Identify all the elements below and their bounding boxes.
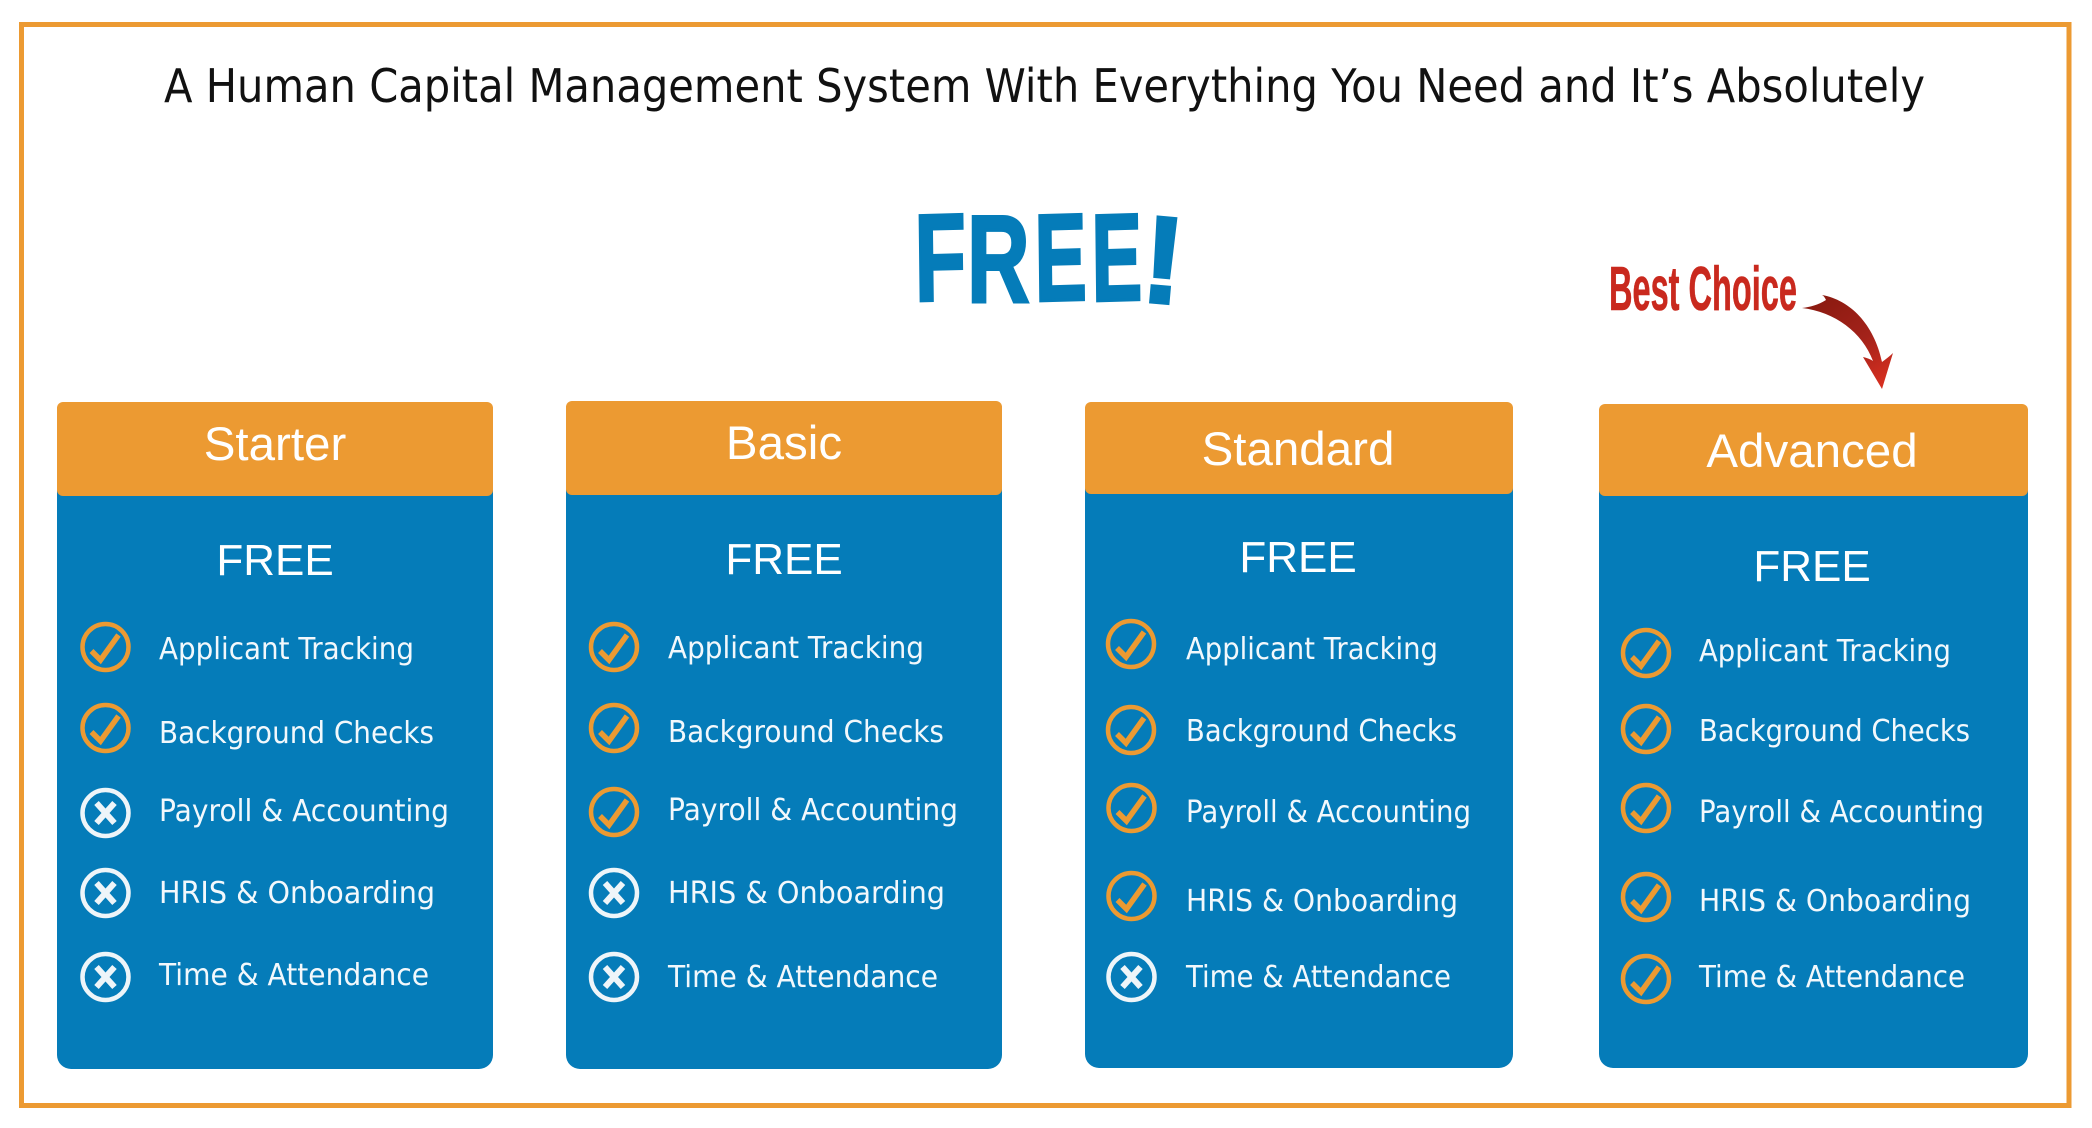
panel: Basic: [566, 401, 1002, 1069]
panel: Standard: [1085, 402, 1513, 1068]
heading: FREE!: !: [1137, 190, 1190, 331]
item: Background Checks included: Background Checks: [668, 715, 944, 750]
item: Payroll & Accounting included: [591, 789, 958, 835]
item: Background Checks included: Background Checks: [1699, 714, 1970, 749]
item: Background Checks included: [1623, 706, 1970, 752]
item: Applicant Tracking included: Applicant Tracking: [668, 631, 924, 666]
item: Applicant Tracking included: Applicant Tracking: [1186, 632, 1438, 667]
heading: FREE!: [914, 187, 1190, 331]
header: Standard: Standard: [1202, 423, 1394, 476]
item: Background Checks included: Background Checks: [159, 716, 434, 751]
heading: FREE!: F: [914, 189, 967, 328]
item: Payroll & Accounting excluded: Payroll & Accounting: [159, 794, 449, 829]
item: Time & Attendance excluded: [591, 954, 938, 1000]
price: FREE: FREE: [1753, 542, 1871, 591]
item: HRIS & Onboarding included: [1108, 873, 1458, 919]
header: Starter: Starter: [204, 418, 346, 471]
item: Background Checks included: [1108, 707, 1457, 753]
item: Payroll & Accounting included: Payroll & Accounting: [1699, 795, 1984, 830]
item: Time & Attendance excluded: Time & Attendance: [1185, 960, 1451, 995]
item: Time & Attendance excluded: [82, 954, 429, 1000]
header: Basic: Basic: [726, 417, 842, 470]
header: Basic: [566, 401, 1002, 495]
item: HRIS & Onboarding excluded: [82, 870, 435, 916]
item: Time & Attendance included: Time & Attendance: [1698, 960, 1965, 995]
header: Advanced: Advanced: [1706, 425, 1918, 478]
price: FREE: FREE: [216, 536, 334, 585]
header: Standard: [1085, 402, 1513, 494]
price: FREE: FREE: [1239, 533, 1357, 582]
header: Starter: [57, 402, 493, 496]
label: Best Choice: Best Choice: [1609, 255, 1797, 324]
item: Applicant Tracking included: [1108, 621, 1438, 667]
item: Background Checks included: [82, 705, 434, 751]
header: Advanced: [1599, 404, 2028, 496]
item: Background Checks included: Background Checks: [1186, 714, 1457, 749]
panel: Starter: [57, 402, 493, 1069]
item: Payroll & Accounting included: [1623, 785, 1984, 831]
item: HRIS & Onboarding excluded: HRIS & Onboarding: [159, 876, 435, 911]
heading: FREE!: R: [967, 190, 1030, 329]
item: Applicant Tracking included: [591, 624, 924, 670]
heading: FREE!: E: [1091, 187, 1143, 328]
heading: FREE!: E: [1034, 187, 1087, 327]
item: Applicant Tracking included: Applicant Tracking: [1699, 634, 1951, 669]
item: Payroll & Accounting included: Payroll & Accounting: [1186, 795, 1471, 830]
item: Applicant Tracking included: [1623, 630, 1951, 676]
item: Time & Attendance excluded: Time & Attendance: [667, 960, 938, 995]
item: Time & Attendance excluded: [1108, 954, 1451, 1000]
item: Background Checks included: [591, 705, 944, 751]
item: Applicant Tracking included: Applicant Tracking: [159, 632, 414, 667]
item: HRIS & Onboarding included: [1623, 874, 1971, 920]
item: Time & Attendance excluded: Time & Attendance: [158, 958, 429, 993]
item: HRIS & Onboarding excluded: [591, 870, 945, 916]
item: HRIS & Onboarding excluded: HRIS & Onboarding: [668, 876, 945, 911]
item: Time & Attendance included: [1623, 956, 1965, 1002]
panel: Advanced: [1599, 404, 2028, 1068]
item: HRIS & Onboarding included: HRIS & Onboarding: [1186, 884, 1458, 919]
title: A Human Capital Management System With Everything You Need and It’s Absolutely: [164, 59, 1925, 113]
item: Applicant Tracking included: [82, 624, 414, 670]
item: Payroll & Accounting excluded: [82, 790, 449, 836]
price: FREE: FREE: [725, 535, 843, 584]
item: Payroll & Accounting included: [1108, 785, 1471, 831]
item: Payroll & Accounting included: Payroll & Accounting: [668, 793, 958, 828]
arrow: pointing to Advanced: [1802, 295, 1893, 389]
item: HRIS & Onboarding included: HRIS & Onboarding: [1699, 884, 1971, 919]
